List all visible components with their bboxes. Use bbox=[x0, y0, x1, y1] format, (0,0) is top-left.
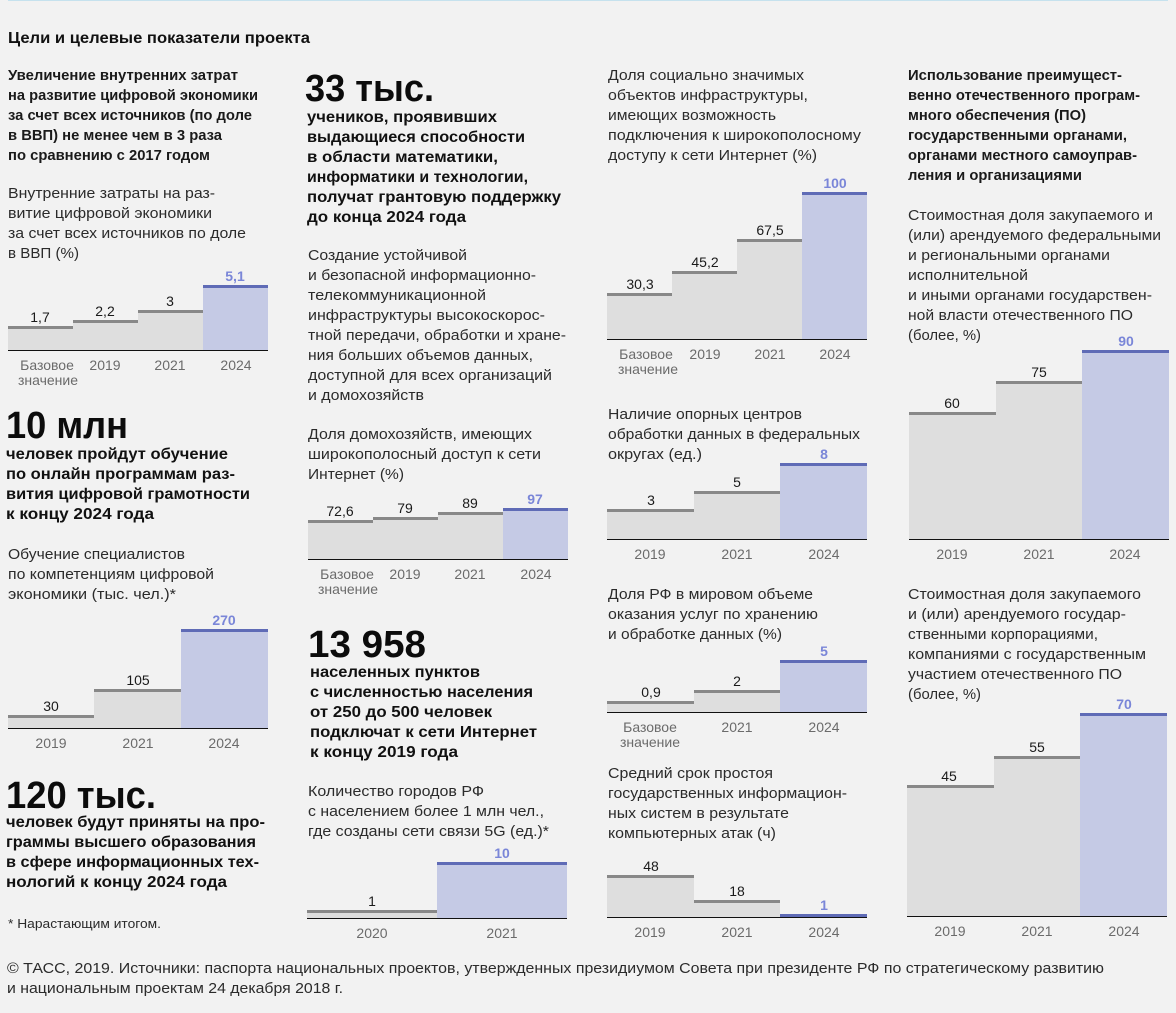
bar chart: world share: 0,9 bbox=[641, 684, 661, 700]
chart caption: household broadband: Доля домохозяйств, имеющих bbox=[308, 426, 533, 443]
bar chart: downtime: 1 bbox=[820, 897, 828, 913]
text: higher education goal bbox=[6, 814, 265, 891]
bar chart: data centers bbox=[607, 446, 867, 562]
bar chart: social objects: 45,2 bbox=[691, 254, 719, 270]
chart caption: spending share of GDP: витие цифровой экономики bbox=[8, 205, 212, 222]
bar chart: data centers: 3 bbox=[647, 492, 655, 508]
bar chart: spending share of GDP: 5,1 bbox=[225, 268, 245, 284]
bar chart: social objects: 2019 bbox=[689, 346, 721, 362]
chart caption: state corporations software share: Стоимостная доля закупаемого bbox=[908, 586, 1141, 603]
heading: infrastructure goal: тной передачи, обработки и хране- bbox=[308, 327, 566, 344]
chart caption: state corporations software share: компаниями с государственным bbox=[908, 646, 1146, 663]
chart caption: specialist training: Обучение специалистов bbox=[8, 546, 185, 563]
bar chart: specialist training: 105 bbox=[126, 672, 150, 688]
bar chart: 5G cities: 1 bbox=[368, 893, 376, 909]
title: Цели и целевые показатели проекта bbox=[8, 30, 310, 47]
footnote: * Нарастающим итогом. bbox=[8, 916, 161, 931]
panel: 120 thousand IT students bbox=[6, 775, 265, 891]
chart caption: downtime: ных систем в результате bbox=[608, 805, 789, 822]
bar chart: household broadband: 2024 bbox=[520, 566, 552, 582]
chart caption: data centers: Наличие опорных центров bbox=[608, 406, 802, 423]
bar chart: state corporations software share: 2021 bbox=[1021, 923, 1053, 939]
panel: 10 million digital literacy bbox=[6, 405, 268, 751]
bar chart: household broadband: Базовое bbox=[320, 566, 374, 582]
bar chart: spending share of GDP: 2021 bbox=[154, 357, 186, 373]
bar chart: federal software share: 90 bbox=[1118, 333, 1134, 349]
bar chart: data centers: 2024 bbox=[808, 546, 840, 562]
chart caption: data centers: округах (ед.) bbox=[608, 446, 702, 463]
text: students goal: информатики и технологии, bbox=[307, 169, 528, 186]
bar chart: state corporations software share: 45 bbox=[941, 768, 957, 784]
heading: domestic software goal: государственными органами, bbox=[908, 127, 1127, 144]
bar chart: world share: 2 bbox=[733, 673, 741, 689]
bar chart: social objects: 100 bbox=[823, 175, 847, 191]
chart caption: spending share of GDP: за счет всех источников по доле bbox=[8, 225, 246, 242]
chart caption: world share: оказания услуг по хранению bbox=[608, 606, 818, 623]
chart caption: federal software share: исполнительной bbox=[908, 267, 1028, 284]
bar chart: spending share of GDP: 3 bbox=[166, 293, 174, 309]
bar chart: downtime bbox=[607, 858, 867, 940]
bar chart: specialist training: 2019 bbox=[35, 735, 67, 751]
bar chart: state corporations software share: 2019 bbox=[934, 923, 966, 939]
bar chart: social objects: 2024 bbox=[819, 346, 851, 362]
bar chart: household broadband bbox=[308, 491, 568, 597]
bar chart: downtime: 2021 bbox=[721, 924, 753, 940]
chart caption: social objects: доступу к сети Интернет (%) bbox=[608, 147, 817, 164]
big number: 13 958: 13 958 bbox=[308, 624, 426, 666]
text: higher education goal: человек будут приняты на про- bbox=[6, 814, 265, 831]
bar chart: spending share of GDP: 2,2 bbox=[95, 303, 115, 319]
bar chart: federal software share bbox=[909, 333, 1169, 562]
chart caption: 5G cities bbox=[308, 783, 549, 840]
heading: infrastructure goal: инфраструктуры высокоскорос- bbox=[308, 307, 545, 324]
panel: domestic software bbox=[907, 67, 1169, 939]
chart caption: downtime: государственных информацион- bbox=[608, 785, 847, 802]
chart caption: federal software share: и региональными органами bbox=[908, 247, 1110, 264]
bar chart: federal software share: 75 bbox=[1031, 364, 1047, 380]
bar chart: specialist training: 2024 bbox=[208, 735, 240, 751]
bar chart: state corporations software share bbox=[907, 696, 1167, 939]
panel: 33 thousand students bbox=[305, 68, 561, 226]
bar chart: data centers: 5 bbox=[733, 474, 741, 490]
chart caption: federal software share: и иными органами государствен- bbox=[908, 287, 1152, 304]
chart caption: spending share of GDP bbox=[8, 185, 246, 262]
text: students goal: до конца 2024 года bbox=[307, 209, 466, 226]
heading: spending goal: Увеличение внутренних затрат bbox=[8, 67, 238, 84]
chart caption: specialist training: экономики (тыс. чел.)* bbox=[8, 586, 176, 603]
heading: infrastructure goal: ния больших объемов данных, bbox=[308, 347, 533, 364]
text: digital literacy goal: человек пройдут обучение bbox=[6, 446, 228, 463]
bar chart: specialist training bbox=[8, 612, 268, 751]
bar chart: social objects bbox=[607, 175, 867, 377]
text: digital literacy goal: к концу 2024 года bbox=[6, 506, 154, 523]
bar chart: federal software share: 2024 bbox=[1109, 546, 1141, 562]
panel: broadband infrastructure bbox=[308, 247, 568, 597]
bar chart: spending share of GDP: значение bbox=[18, 372, 78, 388]
text: higher education goal: нологий к концу 2024 года bbox=[6, 874, 227, 891]
panel: downtime bbox=[607, 765, 867, 940]
source footer: и национальным проектам 24 декабря 2018 г. bbox=[7, 980, 343, 997]
heading: spending goal: на развитие цифровой экономики bbox=[8, 87, 258, 104]
bar chart: household broadband: 2019 bbox=[389, 566, 421, 582]
heading: domestic software goal bbox=[908, 67, 1140, 184]
heading: domestic software goal: органами местного самоуправ- bbox=[908, 147, 1137, 164]
bar chart: federal software share: 60 bbox=[944, 395, 960, 411]
bar chart: data centers: 2021 bbox=[721, 546, 753, 562]
text: digital literacy goal: вития цифровой грамотности bbox=[6, 486, 250, 503]
heading: domestic software goal: много обеспечения (ПО) bbox=[908, 107, 1086, 124]
bar chart: household broadband: 89 bbox=[462, 495, 478, 511]
chart caption: federal software share: (или) арендуемого федеральными bbox=[908, 227, 1161, 244]
chart caption: downtime: Средний срок простоя bbox=[608, 765, 773, 782]
chart caption: downtime: компьютерных атак (ч) bbox=[608, 825, 776, 842]
text: higher education goal: в сфере информационных тех- bbox=[6, 854, 259, 871]
bar chart: world share: 2024 bbox=[808, 719, 840, 735]
chart caption: downtime bbox=[608, 765, 847, 842]
bar chart: social objects: значение bbox=[618, 361, 678, 377]
text: settlements goal bbox=[310, 664, 537, 761]
heading: domestic software goal: Использование преимущест- bbox=[908, 67, 1122, 84]
big number: 33 тыс.: 33 тыс. bbox=[305, 68, 434, 110]
bar chart: data centers: 8 bbox=[820, 446, 828, 462]
heading: spending goal: в ВВП) не менее чем в 3 раза bbox=[8, 127, 223, 144]
chart caption: state corporations software share: и (или) арендуемого государ- bbox=[908, 606, 1126, 623]
bar chart: specialist training: 30 bbox=[43, 698, 59, 714]
chart caption: federal software share: Стоимостная доля закупаемого и bbox=[908, 207, 1153, 224]
chart caption: federal software share: ной власти отечественного ПО bbox=[908, 307, 1133, 324]
text: settlements goal: с численностью населения bbox=[310, 684, 533, 701]
panel: world data services share bbox=[607, 586, 867, 750]
heading: infrastructure goal: Создание устойчивой bbox=[308, 247, 467, 264]
bar chart: household broadband: 72,6 bbox=[326, 503, 354, 519]
bar chart: state corporations software share: 70 bbox=[1116, 696, 1132, 712]
text: students goal: выдающиеся способности bbox=[307, 129, 525, 146]
text: settlements goal: подключат к сети Интернет bbox=[310, 724, 537, 741]
bar chart: social objects: 2021 bbox=[754, 346, 786, 362]
text: settlements goal: населенных пунктов bbox=[310, 664, 480, 681]
bar chart: specialist training: 270 bbox=[212, 612, 236, 628]
bar chart: world share: значение bbox=[620, 734, 680, 750]
bar chart: social objects: 30,3 bbox=[626, 276, 654, 292]
bar chart: world share: 2021 bbox=[721, 719, 753, 735]
heading: spending goal bbox=[8, 67, 258, 164]
chart caption: federal software share bbox=[908, 207, 1161, 344]
heading: infrastructure goal: и домохозяйств bbox=[308, 387, 424, 404]
text: settlements goal: к концу 2019 года bbox=[310, 744, 458, 761]
bar chart: household broadband: 2021 bbox=[454, 566, 486, 582]
bar chart: world share: Базовое bbox=[623, 719, 677, 735]
chart caption: social objects: имеющих возможность bbox=[608, 107, 776, 124]
bar chart: spending share of GDP: 2024 bbox=[220, 357, 252, 373]
chart caption: specialist training: по компетенциям цифровой bbox=[8, 566, 214, 583]
chart caption: federal software share: (более, %) bbox=[908, 327, 981, 344]
bar chart: spending share of GDP: Базовое bbox=[20, 357, 74, 373]
heading: infrastructure goal: телекоммуникационной bbox=[308, 287, 486, 304]
source footer bbox=[7, 960, 1104, 997]
chart caption: household broadband bbox=[308, 426, 541, 483]
panel: internal spending on digital economy bbox=[8, 67, 268, 388]
heading: spending goal: за счет всех источников (по доле bbox=[8, 107, 252, 124]
text: higher education goal: граммы высшего образования bbox=[6, 834, 256, 851]
panel: socially significant objects bbox=[607, 67, 867, 377]
bar chart: federal software share: 2019 bbox=[936, 546, 968, 562]
bar chart: specialist training: 2021 bbox=[122, 735, 154, 751]
text: students goal bbox=[307, 109, 561, 226]
panel: 13 958 settlements bbox=[307, 624, 567, 941]
chart caption: spending share of GDP: в ВВП (%) bbox=[8, 245, 79, 262]
chart caption: data centers bbox=[608, 406, 861, 463]
heading: infrastructure goal: и безопасной информационно- bbox=[308, 267, 536, 284]
chart caption: social objects: подключения к широкополосному bbox=[608, 127, 862, 144]
big number: 120 тыс.: 120 тыс. bbox=[6, 775, 156, 817]
heading: domestic software goal: ления и организациями bbox=[908, 167, 1082, 184]
chart caption: social objects bbox=[608, 67, 862, 164]
text: students goal: получат грантовую поддержку bbox=[307, 189, 561, 206]
bar chart: social objects: 67,5 bbox=[756, 222, 784, 238]
bar chart: household broadband: 79 bbox=[397, 500, 413, 516]
chart caption: state corporations software share: (более, %) bbox=[908, 686, 981, 703]
heading: domestic software goal: венно отечественного програм- bbox=[908, 87, 1140, 104]
chart caption: data centers: обработки данных в федеральных bbox=[608, 426, 861, 443]
heading: infrastructure goal bbox=[308, 247, 566, 404]
text: students goal: учеников, проявивших bbox=[307, 109, 497, 126]
bar chart: downtime: 18 bbox=[729, 883, 745, 899]
bar chart: 5G cities: 2020 bbox=[356, 925, 388, 941]
chart caption: specialist training bbox=[8, 546, 214, 603]
text: students goal: в области математики, bbox=[307, 149, 498, 166]
chart caption: world share bbox=[608, 586, 818, 643]
bar chart: world share: 5 bbox=[820, 643, 828, 659]
chart caption: 5G cities: Количество городов РФ bbox=[308, 783, 484, 800]
chart caption: social objects: Доля социально значимых bbox=[608, 67, 805, 84]
chart caption: world share: и обработке данных (%) bbox=[608, 626, 782, 643]
bar chart: federal software share: 2021 bbox=[1023, 546, 1055, 562]
chart caption: state corporations software share: участием отечественного ПО bbox=[908, 666, 1122, 683]
bar chart: spending share of GDP: 2019 bbox=[89, 357, 121, 373]
heading: spending goal: по сравнению с 2017 годом bbox=[8, 147, 210, 164]
chart caption: 5G cities: с населением более 1 млн чел., bbox=[308, 803, 544, 820]
bar chart: state corporations software share: 55 bbox=[1029, 739, 1045, 755]
bar chart: spending share of GDP bbox=[8, 268, 268, 388]
chart caption: household broadband: Интернет (%) bbox=[308, 466, 404, 483]
chart caption: social objects: объектов инфраструктуры, bbox=[608, 87, 808, 104]
panel: data centers bbox=[607, 406, 867, 562]
chart caption: spending share of GDP: Внутренние затраты на раз- bbox=[8, 185, 215, 202]
chart caption: state corporations software share bbox=[908, 586, 1146, 703]
chart caption: 5G cities: где созданы сети связи 5G (ед.)* bbox=[308, 823, 549, 840]
text: digital literacy goal bbox=[6, 446, 250, 523]
bar chart: 5G cities bbox=[307, 845, 567, 941]
bar chart: downtime: 2024 bbox=[808, 924, 840, 940]
top accent line bbox=[8, 0, 1168, 1]
chart caption: state corporations software share: ственными корпорациями, bbox=[908, 626, 1098, 643]
bar chart: household broadband: 97 bbox=[527, 491, 543, 507]
bar chart: data centers: 2019 bbox=[634, 546, 666, 562]
bar chart: 5G cities: 10 bbox=[494, 845, 510, 861]
bar chart: social objects: Базовое bbox=[619, 346, 673, 362]
bar chart: household broadband: значение bbox=[318, 581, 378, 597]
bar chart: 5G cities: 2021 bbox=[486, 925, 518, 941]
source footer: © ТАСС, 2019. Источники: паспорта национальных проектов, утвержденных президиумом Совета при президенте РФ по стратегическому развитию bbox=[7, 960, 1104, 977]
chart caption: world share: Доля РФ в мировом объеме bbox=[608, 586, 813, 603]
bar chart: state corporations software share: 2024 bbox=[1108, 923, 1140, 939]
bar chart: downtime: 48 bbox=[643, 858, 659, 874]
bar chart: world share bbox=[607, 643, 867, 750]
bar chart: spending share of GDP: 1,7 bbox=[30, 309, 50, 325]
text: digital literacy goal: по онлайн программам раз- bbox=[6, 466, 235, 483]
text: settlements goal: от 250 до 500 человек bbox=[310, 704, 492, 721]
chart caption: household broadband: широкополосный доступ к сети bbox=[308, 446, 541, 463]
big number: 10 млн: 10 млн bbox=[6, 405, 128, 447]
bar chart: downtime: 2019 bbox=[634, 924, 666, 940]
heading: infrastructure goal: доступной для всех организаций bbox=[308, 367, 552, 384]
